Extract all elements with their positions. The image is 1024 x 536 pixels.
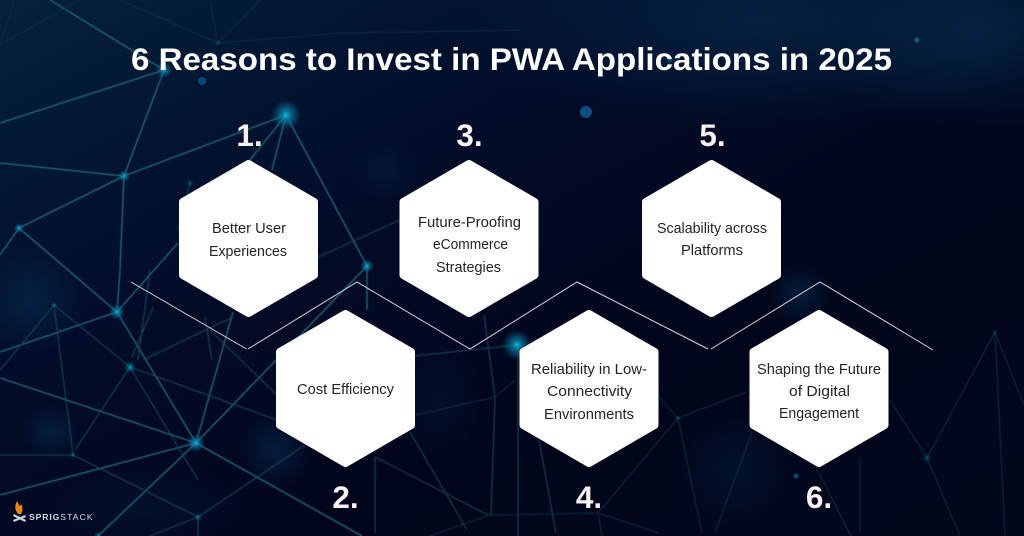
item 1: better user experiences: Experiences [209,244,287,260]
item 1: better user experiences [183,117,314,313]
item 2: cost efficiency: 2. [332,479,359,515]
item 5: scalability across platforms: Platforms [681,243,743,259]
item 2: cost efficiency: Cost Efficiency [297,382,395,398]
zigzag connector line [131,282,933,350]
item 6: shaping the future of digital engagement: Engagement [779,406,859,422]
item 2: cost efficiency [280,314,411,515]
item 1: better user experiences: 1. [236,117,263,153]
item 6: shaping the future of digital engagement: of Digital [789,384,850,400]
item 3: future-proofing ecommerce strategies: eCommerce [433,237,508,253]
item 5: scalability across platforms: 5. [699,117,726,153]
item 5: scalability across platforms [646,117,777,313]
logo: sprigstack [13,501,94,522]
item 5: scalability across platforms: Scalability across [657,221,767,237]
title: 6 Reasons to Invest in PWA Applications in 2025 [131,41,892,77]
item 4: reliability in low-connectivity environments [524,314,654,515]
item 4: reliability in low-connectivity environments: Environments [544,407,634,423]
item 4: reliability in low-connectivity environments: Reliability in Low- [531,362,647,378]
item 3: future-proofing ecommerce strategies: 3. [456,117,483,153]
logo: sprigstack: SPRIGSTACK [29,512,94,522]
item 3: future-proofing ecommerce strategies [404,117,534,313]
item 3: future-proofing ecommerce strategies: Future-Proofing [418,215,521,231]
item 6: shaping the future of digital engagement: 6. [806,479,832,515]
item 4: reliability in low-connectivity environments: 4. [576,479,602,515]
item 6: shaping the future of digital engagement [754,314,884,515]
item 6: shaping the future of digital engagement: Shaping the Future [757,362,881,378]
item 3: future-proofing ecommerce strategies: Strategies [436,260,501,276]
item 1: better user experiences: Better User [212,221,286,237]
item 4: reliability in low-connectivity environments: Connectivity [547,384,633,400]
